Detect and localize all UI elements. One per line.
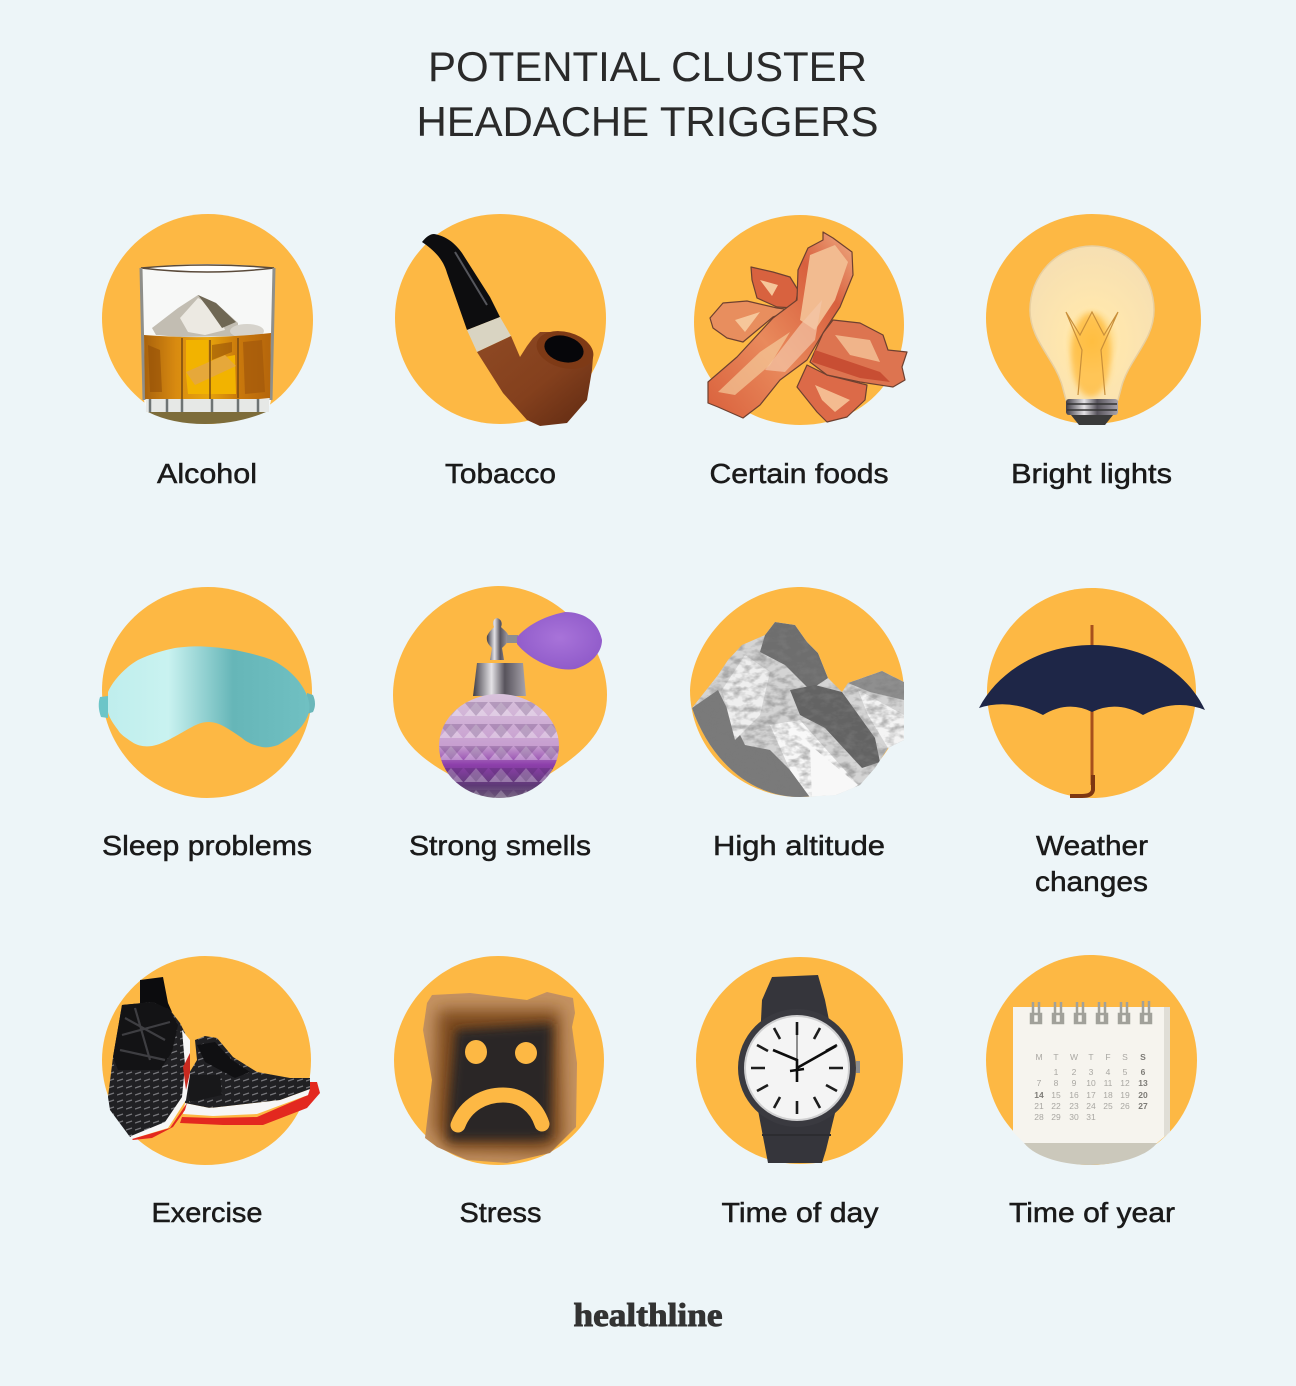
calendar dates: M — [1035, 1052, 1043, 1062]
label: Time of day: Time of day — [722, 1197, 878, 1228]
calendar dates: T — [1088, 1052, 1094, 1062]
calendar dates: 14 — [1034, 1090, 1044, 1100]
icon: umbrella — [979, 625, 1205, 796]
label: Weather changes: Weather — [1036, 830, 1148, 861]
calendar dates: 15 — [1051, 1090, 1061, 1100]
burnt face cut-outs — [458, 1040, 542, 1125]
calendar dates: 29 — [1051, 1112, 1061, 1122]
icon: wristwatch — [738, 975, 860, 1163]
blob: day — [696, 957, 903, 1164]
icon: bacon — [708, 232, 907, 422]
blob: alcohol — [102, 214, 313, 424]
calendar dates: W — [1070, 1052, 1078, 1062]
calendar dates: 1 — [1054, 1067, 1059, 1077]
calendar dates: 23 — [1069, 1101, 1079, 1111]
icon: mountain — [692, 622, 904, 797]
panel: weather changes — [979, 588, 1205, 897]
blob: altitude — [690, 587, 904, 797]
label: Weather changes: changes — [1035, 866, 1148, 897]
icon: light bulb — [1030, 246, 1154, 425]
blob: stress — [394, 956, 604, 1165]
panel: sleep problems — [99, 587, 315, 861]
label: Certain foods: Certain foods — [710, 458, 888, 489]
calendar dates: 20 — [1138, 1090, 1148, 1100]
blob: sleep — [102, 587, 312, 798]
calendar dates: T — [1053, 1052, 1059, 1062]
calendar dates: 3 — [1089, 1067, 1094, 1077]
panel: alcohol — [102, 214, 313, 489]
calendar dates: 4 — [1106, 1067, 1111, 1077]
calendar dates: 7 — [1037, 1078, 1042, 1088]
panel: time of year — [986, 955, 1197, 1228]
calendar dates: 18 — [1103, 1090, 1113, 1100]
calendar dates: 28 — [1034, 1112, 1044, 1122]
label: Weather changes — [1035, 830, 1148, 897]
calendar dates: 21 — [1034, 1101, 1044, 1111]
calendar dates: F — [1105, 1052, 1111, 1062]
label: Sleep problems: Sleep problems — [102, 830, 312, 861]
calendar dates: 26 — [1120, 1101, 1130, 1111]
panel: bright lights — [986, 214, 1201, 489]
calendar dates: S — [1140, 1052, 1146, 1062]
label: Time of year: Time of year — [1009, 1197, 1175, 1228]
calendar dates: 12 — [1120, 1078, 1130, 1088]
panel: exercise — [102, 956, 320, 1228]
label: Tobacco: Tobacco — [445, 458, 556, 489]
calendar dates: 24 — [1086, 1101, 1096, 1111]
left shoe — [108, 977, 190, 1140]
panel: time of day — [696, 957, 903, 1228]
blob: smells — [393, 586, 607, 790]
icon: sleep mask — [99, 646, 315, 747]
blob: foods — [694, 215, 904, 425]
icon: running shoes — [108, 977, 320, 1140]
calendar dates: 2 — [1072, 1067, 1077, 1077]
logo: healthline: healthline — [574, 1298, 722, 1334]
blob: exercise — [102, 956, 311, 1165]
calendar dates: 31 — [1086, 1112, 1096, 1122]
label: Alcohol: Alcohol — [157, 458, 257, 489]
calendar dates: 5 — [1123, 1067, 1128, 1077]
calendar dates: 27 — [1138, 1101, 1148, 1111]
title: HEADACHE TRIGGERS — [416, 98, 878, 145]
title: POTENTIAL CLUSTER — [428, 43, 867, 90]
panel: tobacco — [395, 214, 606, 489]
blob: lights — [986, 214, 1201, 424]
icon: burnt toast — [420, 988, 580, 1168]
panel: strong smells — [393, 586, 607, 861]
calendar dates: 6 — [1141, 1067, 1146, 1077]
blob: weather — [987, 588, 1196, 798]
blob: year — [986, 955, 1197, 1165]
calendar dates: 22 — [1051, 1101, 1061, 1111]
panel: certain foods — [694, 215, 907, 489]
calendar dates: 30 — [1069, 1112, 1079, 1122]
calendar dates: 8 — [1054, 1078, 1059, 1088]
label: High altitude: High altitude — [713, 830, 885, 861]
calendar dates: 11 — [1104, 1078, 1113, 1088]
panel: stress — [394, 956, 604, 1228]
icon: whisky glass — [141, 264, 274, 424]
calendar dates: 17 — [1086, 1090, 1096, 1100]
calendar dates: 13 — [1138, 1078, 1148, 1088]
calendar dates: S — [1122, 1052, 1128, 1062]
calendar dates: 9 — [1072, 1078, 1077, 1088]
label: Stress: Stress — [460, 1197, 542, 1228]
calendar dates: 19 — [1120, 1090, 1130, 1100]
calendar rings — [1031, 1001, 1151, 1023]
blob: tobacco — [395, 214, 606, 424]
label: Bright lights: Bright lights — [1011, 458, 1172, 489]
icon: perfume bottle — [439, 612, 602, 798]
panel: high altitude — [685, 587, 910, 861]
right shoe — [180, 1036, 320, 1125]
label: Strong smells: Strong smells — [409, 830, 591, 861]
title — [416, 43, 878, 145]
calendar dates: 25 — [1103, 1101, 1113, 1111]
calendar dates: 10 — [1086, 1078, 1096, 1088]
label: Exercise: Exercise — [152, 1197, 262, 1228]
icon: pipe — [422, 234, 598, 426]
calendar dates: 16 — [1069, 1090, 1079, 1100]
calendar dates — [1034, 1052, 1148, 1122]
icon: desk calendar — [1013, 1001, 1170, 1165]
